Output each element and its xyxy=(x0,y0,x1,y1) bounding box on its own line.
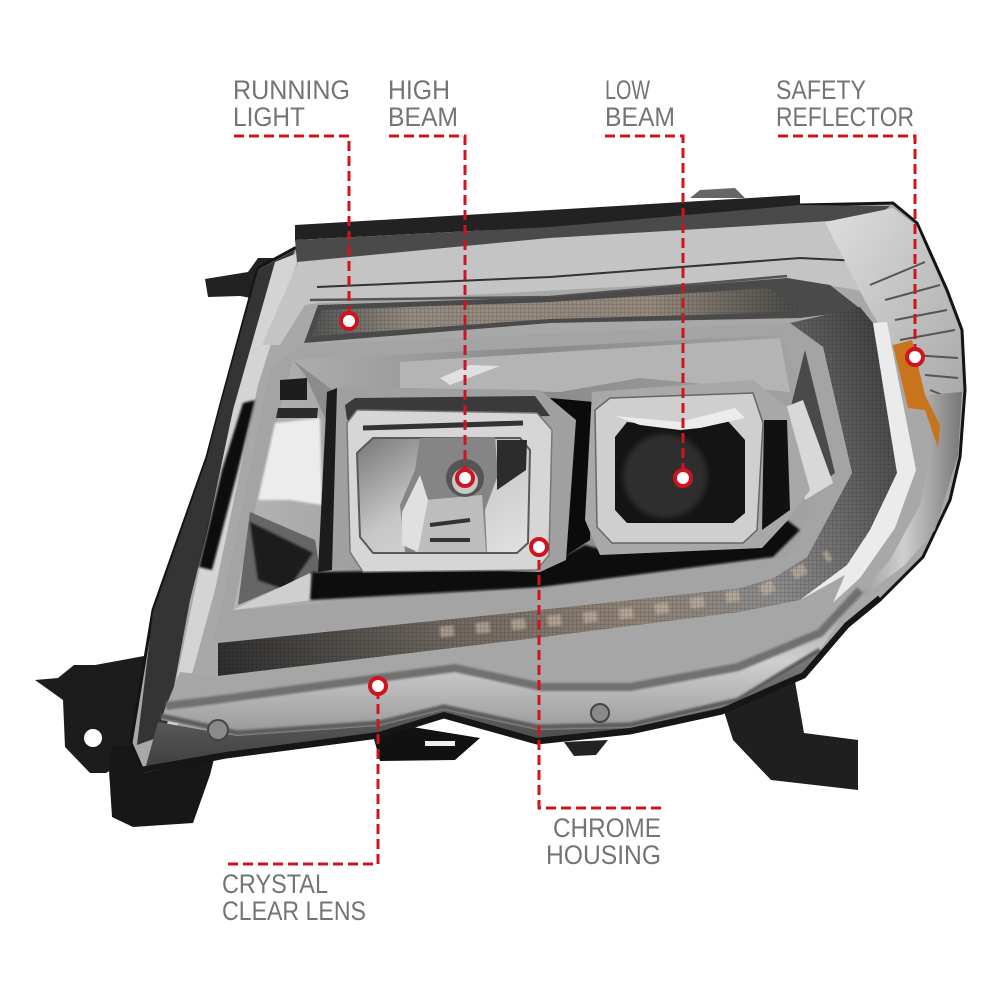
chrome bezel ring xyxy=(213,323,852,642)
outer tube xyxy=(845,392,962,610)
top mount tab xyxy=(690,188,745,198)
headlight assembly xyxy=(35,188,965,827)
marker dot xyxy=(341,313,357,329)
callout: running light xyxy=(233,75,357,329)
bulb reflector xyxy=(400,437,527,552)
right mounting bracket xyxy=(722,670,858,790)
projector frame xyxy=(347,410,552,572)
marker dot xyxy=(675,470,691,486)
upper left tab xyxy=(205,258,285,300)
right projector xyxy=(595,393,763,543)
amber reflector xyxy=(893,340,940,448)
projector frame xyxy=(595,393,763,543)
chrome housing box right xyxy=(585,380,810,555)
dark right of right projector xyxy=(762,420,790,530)
leader line xyxy=(605,136,683,478)
gray lens area xyxy=(166,575,845,706)
upper running light bar xyxy=(304,278,862,343)
label text: REFLECTOR xyxy=(776,102,914,132)
label text xyxy=(233,75,350,132)
dark column between projectors xyxy=(540,398,594,572)
label text xyxy=(776,75,914,132)
callout: chrome housing xyxy=(531,539,661,870)
bottom hatch strip xyxy=(144,627,847,773)
top upper band xyxy=(262,218,905,345)
label text: HIGH xyxy=(388,75,450,105)
leader line xyxy=(389,136,465,478)
corner lens xyxy=(825,208,962,410)
chamber highlights xyxy=(233,338,835,610)
marker dot xyxy=(370,678,386,694)
projector lens xyxy=(623,434,707,518)
bottom black edge xyxy=(140,598,880,770)
black top strip xyxy=(295,195,800,240)
label text xyxy=(222,869,366,926)
leader line xyxy=(234,136,349,321)
projector top glare xyxy=(615,408,745,430)
left projector xyxy=(347,410,552,572)
left edge strip xyxy=(137,250,300,745)
callout: safety reflector xyxy=(776,75,923,365)
chrome housing box left xyxy=(318,387,576,572)
label text xyxy=(546,813,661,870)
marker dot xyxy=(907,349,923,365)
label text: SAFETY xyxy=(776,75,866,105)
left mounting bracket xyxy=(35,656,150,773)
marker dot xyxy=(531,539,547,555)
label text: HOUSING xyxy=(546,840,661,870)
label text: BEAM xyxy=(605,102,675,132)
label text: BEAM xyxy=(388,102,458,132)
hatched band under strip xyxy=(295,205,890,262)
lens screw left xyxy=(208,720,228,740)
label text: LOW xyxy=(605,75,650,105)
inner chamber xyxy=(233,335,835,610)
label text xyxy=(388,75,458,132)
small clip xyxy=(564,740,608,756)
projector glass xyxy=(357,438,530,553)
label text: CLEAR LENS xyxy=(222,896,366,926)
frame inner dark line xyxy=(363,423,523,428)
center clip xyxy=(373,725,480,761)
label text: CRYSTAL xyxy=(222,869,328,899)
lower running light bar xyxy=(218,307,897,676)
wave trim xyxy=(161,590,860,733)
callout: low beam xyxy=(605,75,691,486)
label text: LIGHT xyxy=(233,102,305,132)
label text xyxy=(605,75,675,132)
label text: CHROME xyxy=(553,813,661,843)
callout: crystal clear lens xyxy=(222,678,386,926)
lower mounting foot xyxy=(109,745,215,827)
right white band xyxy=(740,322,916,632)
dark band under projectors xyxy=(310,520,800,600)
top band lines xyxy=(310,258,880,300)
leader line xyxy=(228,686,378,864)
lens screw right xyxy=(591,704,609,722)
marker dot xyxy=(457,470,473,486)
label text: RUNNING xyxy=(233,75,350,105)
leader line xyxy=(539,547,661,808)
callout: high beam xyxy=(388,75,473,486)
leader line xyxy=(778,136,915,357)
lens body xyxy=(131,203,965,773)
projector black interior xyxy=(615,420,745,523)
